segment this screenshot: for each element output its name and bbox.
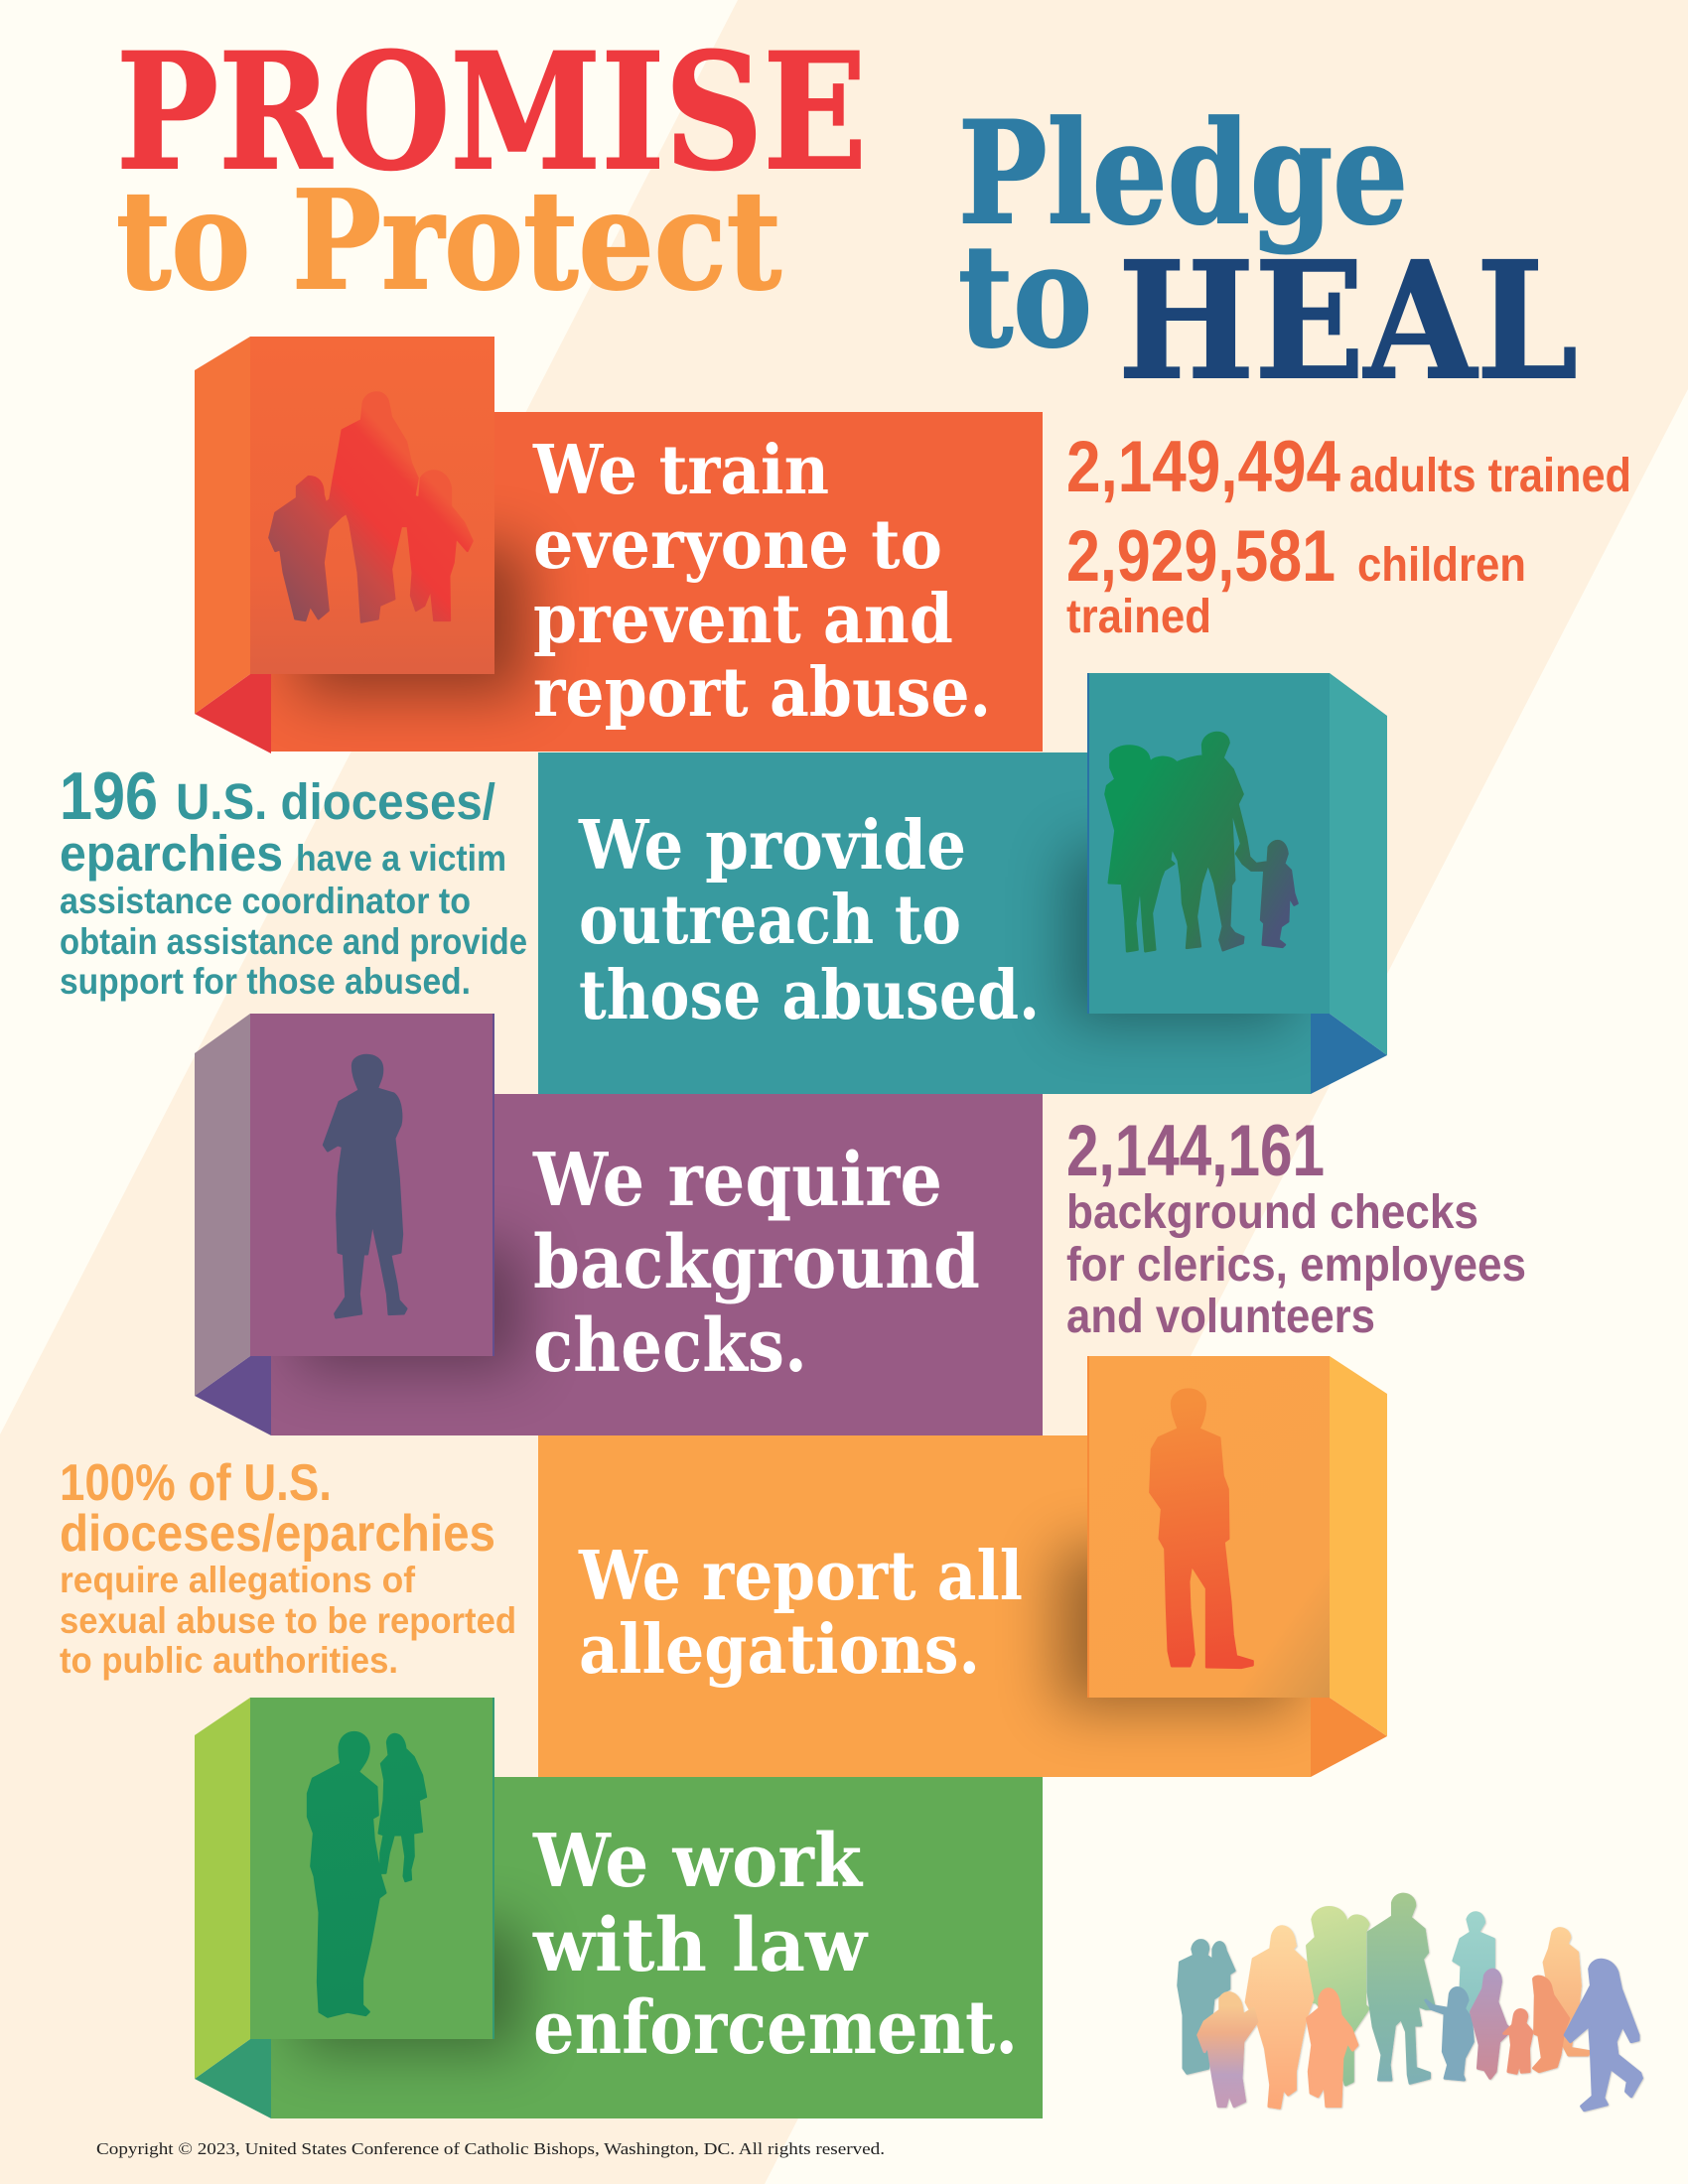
panel shadow	[1067, 849, 1291, 1023]
callout: reporting allegations: 100% of U.S.	[60, 1454, 332, 1512]
panel shadow	[1057, 1549, 1296, 1707]
callout: reporting allegations: require allegations of	[60, 1560, 416, 1600]
icon: crowd of people silhouettes	[1179, 1894, 1641, 2111]
title: Pledge to Heal	[958, 91, 1578, 416]
front panel	[1087, 1356, 1330, 1698]
panel shadow	[298, 546, 526, 695]
panel shadow	[298, 1926, 521, 2050]
ribbon band	[271, 1777, 1043, 2118]
callout: training numbers	[1066, 427, 1631, 643]
callout: victim assistance coordinators: assistance coordinator to	[60, 881, 471, 921]
panel text: everyone to	[533, 505, 942, 585]
panel text: We require	[532, 1138, 942, 1223]
panel text: We work	[532, 1819, 864, 1904]
panel text: outreach to	[579, 881, 961, 960]
panel: we work with law enforcement	[195, 1698, 1043, 2118]
panel text: We report all	[578, 1537, 1023, 1616]
callout: training numbers: 2,149,494	[1066, 427, 1340, 507]
callout: victim assistance coordinators: U.S. dioceses/	[176, 773, 495, 830]
copyright line: Copyright © 2023, United States Conference of Catholic Bishops, Washington, DC. All rights reserved.	[96, 2139, 885, 2158]
title: Promise to Protect	[116, 18, 867, 321]
ribbon band	[271, 412, 1043, 751]
ribbon band	[538, 752, 1311, 1094]
callout: victim assistance coordinators: obtain assistance and provide	[60, 921, 527, 962]
panel text: checks.	[533, 1303, 807, 1389]
panel text: those abused.	[579, 956, 1040, 1035]
heading word: Pledge: Pledge	[958, 91, 1408, 256]
heading word: HEAL: HEAL	[1118, 227, 1578, 416]
ribbon band	[538, 1435, 1311, 1777]
callout: victim assistance coordinators: support for those abused.	[60, 961, 471, 1002]
ribbon side	[195, 337, 250, 714]
panel shadow	[298, 1246, 521, 1370]
front panel	[250, 1698, 494, 2039]
front panel	[250, 337, 494, 674]
panel: we provide outreach	[538, 673, 1387, 1094]
ribbon fold	[1311, 1698, 1387, 1777]
icon: standing man	[324, 1055, 406, 1317]
panel text	[532, 1819, 1018, 2071]
ribbon band	[271, 1094, 1043, 1435]
callout: victim assistance coordinators: have a victim	[296, 838, 506, 879]
ribbon fold	[195, 1356, 271, 1435]
callout: background check numbers: 2,144,161	[1066, 1111, 1325, 1191]
panel text: with law	[532, 1903, 869, 1988]
callout: background check numbers	[1066, 1111, 1526, 1343]
callout: reporting allegations: dioceses/eparchies	[60, 1505, 495, 1563]
callout: victim assistance coordinators: 196	[60, 758, 158, 834]
icon: standing man	[1150, 1390, 1253, 1668]
ribbon fold	[195, 2039, 271, 2118]
panel text	[578, 806, 1040, 1035]
callout: background check numbers: and volunteers	[1066, 1291, 1375, 1343]
panel text: background	[533, 1220, 980, 1305]
callout: training numbers: trained	[1066, 591, 1211, 643]
heading words: to Protect: to Protect	[116, 161, 781, 321]
ribbon side	[1330, 1356, 1387, 1736]
callout: training numbers: 2,929,581	[1066, 516, 1336, 597]
front panel	[250, 1014, 494, 1356]
panel text: We provide	[578, 806, 966, 886]
callout: background check numbers: for clerics, employees	[1066, 1239, 1526, 1292]
callout: victim assistance coordinators: eparchies	[60, 825, 283, 882]
ribbon side	[1330, 673, 1387, 1055]
panel text	[532, 1138, 980, 1389]
ribbon fold	[1311, 1014, 1387, 1094]
ribbon side	[195, 1698, 250, 2079]
panel: we require background checks	[195, 1014, 1043, 1435]
ribbon side	[195, 1014, 250, 1396]
callout: reporting allegations	[60, 1454, 516, 1681]
callout: background check numbers: background checks	[1066, 1186, 1478, 1239]
callout: reporting allegations: to public authorities.	[60, 1640, 398, 1681]
panel text: allegations.	[579, 1610, 980, 1690]
heading word: to: to	[958, 214, 1092, 379]
icon: man and woman	[308, 1732, 426, 2017]
panel text	[578, 1537, 1023, 1690]
callout: reporting allegations: sexual abuse to be reported	[60, 1600, 516, 1641]
callout: training numbers: adults trained	[1349, 450, 1631, 502]
panel text	[532, 431, 991, 733]
callout: victim assistance coordinators	[60, 758, 527, 1002]
callout: training numbers: children	[1357, 539, 1526, 592]
front panel	[1087, 673, 1330, 1014]
panel text: enforcement.	[533, 1985, 1018, 2071]
ribbon fold	[195, 674, 271, 753]
panel text: report abuse.	[533, 653, 991, 733]
panel: we train	[195, 337, 1043, 753]
heading word: PROMISE: PROMISE	[116, 18, 867, 205]
panel text: prevent and	[533, 580, 953, 659]
icon: family of four	[1105, 733, 1298, 951]
icon: mother with two children	[269, 392, 473, 622]
panel: we report all allegations	[538, 1356, 1387, 1777]
panel text: We train	[532, 431, 829, 510]
